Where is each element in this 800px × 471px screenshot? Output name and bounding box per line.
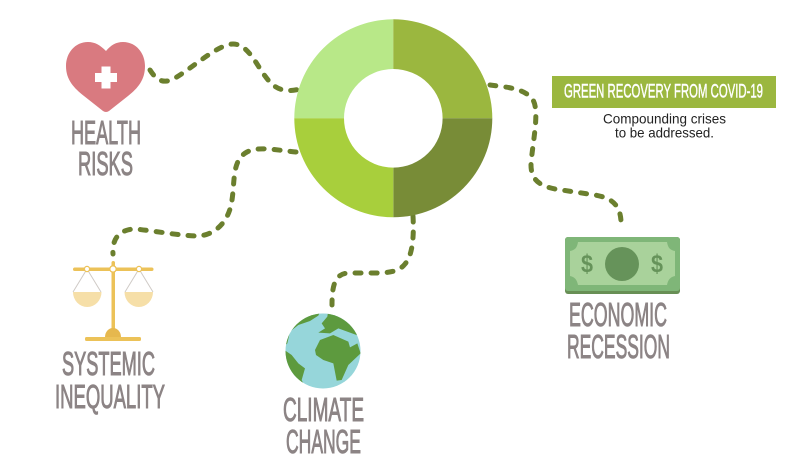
label: climate change: CHANGE bbox=[286, 423, 361, 460]
icon: heart with medical cross bbox=[66, 42, 145, 112]
label: health risks: RISKS bbox=[78, 145, 133, 182]
dollar sign left: $ bbox=[581, 250, 593, 278]
label: systemic inequality bbox=[55, 345, 165, 415]
segment: bottom left bbox=[294, 118, 393, 217]
segment: top right bbox=[393, 19, 492, 118]
dollar sign right: $ bbox=[651, 250, 663, 278]
connector: health risks bbox=[150, 44, 300, 91]
icon: balance scales bbox=[73, 261, 154, 341]
label: economic recession bbox=[567, 296, 670, 365]
label: climate change bbox=[283, 391, 364, 460]
label: economic recession: RECESSION bbox=[567, 328, 670, 365]
icon: globe bbox=[286, 314, 360, 388]
segment: bottom right bbox=[393, 118, 492, 217]
segment: top left bbox=[294, 19, 393, 118]
connector: climate change bbox=[332, 216, 413, 305]
subtitle text bbox=[603, 110, 726, 140]
label: health risks bbox=[71, 114, 141, 182]
subtitle text: to be addressed. bbox=[615, 124, 714, 140]
connector: systemic inequality bbox=[113, 149, 296, 254]
icon: banknote bbox=[565, 237, 680, 294]
donut chart bbox=[294, 19, 492, 217]
label: health risks: HEALTH bbox=[71, 114, 141, 151]
connector: economic recession bbox=[490, 85, 621, 227]
label: climate change: CLIMATE bbox=[283, 391, 364, 428]
label: systemic inequality: SYSTEMIC bbox=[62, 345, 155, 382]
title banner bbox=[552, 76, 776, 108]
label: economic recession: ECONOMIC bbox=[569, 296, 667, 333]
label: systemic inequality: INEQUALITY bbox=[55, 378, 165, 415]
subtitle text: Compounding crises bbox=[603, 110, 726, 126]
